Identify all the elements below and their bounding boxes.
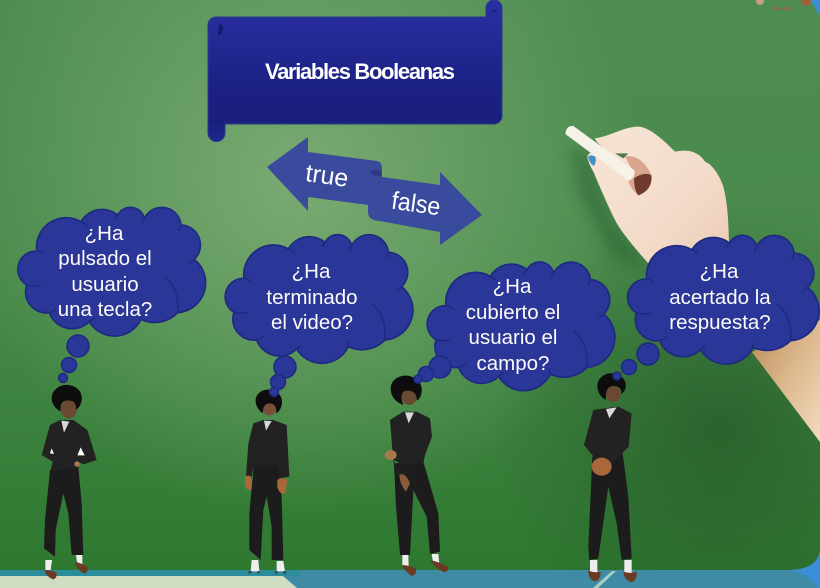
person 2 — [245, 390, 289, 574]
thought bubbles 2 — [270, 356, 296, 396]
cloud 4 text: acertado la — [669, 286, 771, 309]
cloud 1 text: usuario — [71, 273, 139, 296]
icon: hand holding chalk — [565, 126, 729, 283]
cloud 2 text: el video? — [271, 311, 353, 334]
thought bubbles 4 — [613, 343, 659, 380]
person 3 — [385, 376, 448, 576]
blue nail — [588, 155, 596, 166]
person 4 — [584, 373, 637, 582]
cloud 3 text: campo? — [477, 352, 549, 375]
thought cloud 2 — [225, 235, 413, 396]
cloud 2 text: ¿Ha — [292, 260, 331, 283]
cloud 2 text: terminado — [266, 286, 358, 309]
thought bubbles 3 — [414, 356, 451, 383]
logo at top right: ONLINE — [773, 6, 791, 11]
cloud 4 text: ¿Ha — [700, 260, 739, 283]
gap between fingers — [625, 156, 652, 195]
cloud 4 text: respuesta? — [669, 311, 771, 334]
cloud 1 text: pulsado el — [58, 247, 152, 270]
logo at top right — [756, 0, 811, 11]
cloud 3 text: ¿Ha — [493, 275, 532, 298]
thought cloud 4 — [613, 235, 819, 380]
label: false: false — [390, 187, 442, 221]
cloud 3 text: cubierto el — [466, 301, 560, 324]
true/false double arrow — [267, 137, 482, 245]
hand silhouette — [587, 127, 729, 283]
chalk — [565, 126, 635, 181]
cloud 1 text: ¿Ha — [85, 222, 124, 245]
thought cloud 1 — [18, 207, 206, 382]
title scroll banner — [208, 0, 502, 142]
thought bubbles 1 — [58, 335, 89, 382]
person 1 — [42, 385, 97, 579]
forearm at right — [752, 320, 820, 442]
thought cloud 3 — [414, 262, 615, 391]
title text: Variables Booleanas — [265, 59, 455, 84]
floor strip — [0, 570, 818, 588]
cloud 1 text: una tecla? — [58, 298, 152, 321]
label: true: true — [304, 159, 350, 193]
cloud 3 text: usuario el — [469, 326, 557, 349]
